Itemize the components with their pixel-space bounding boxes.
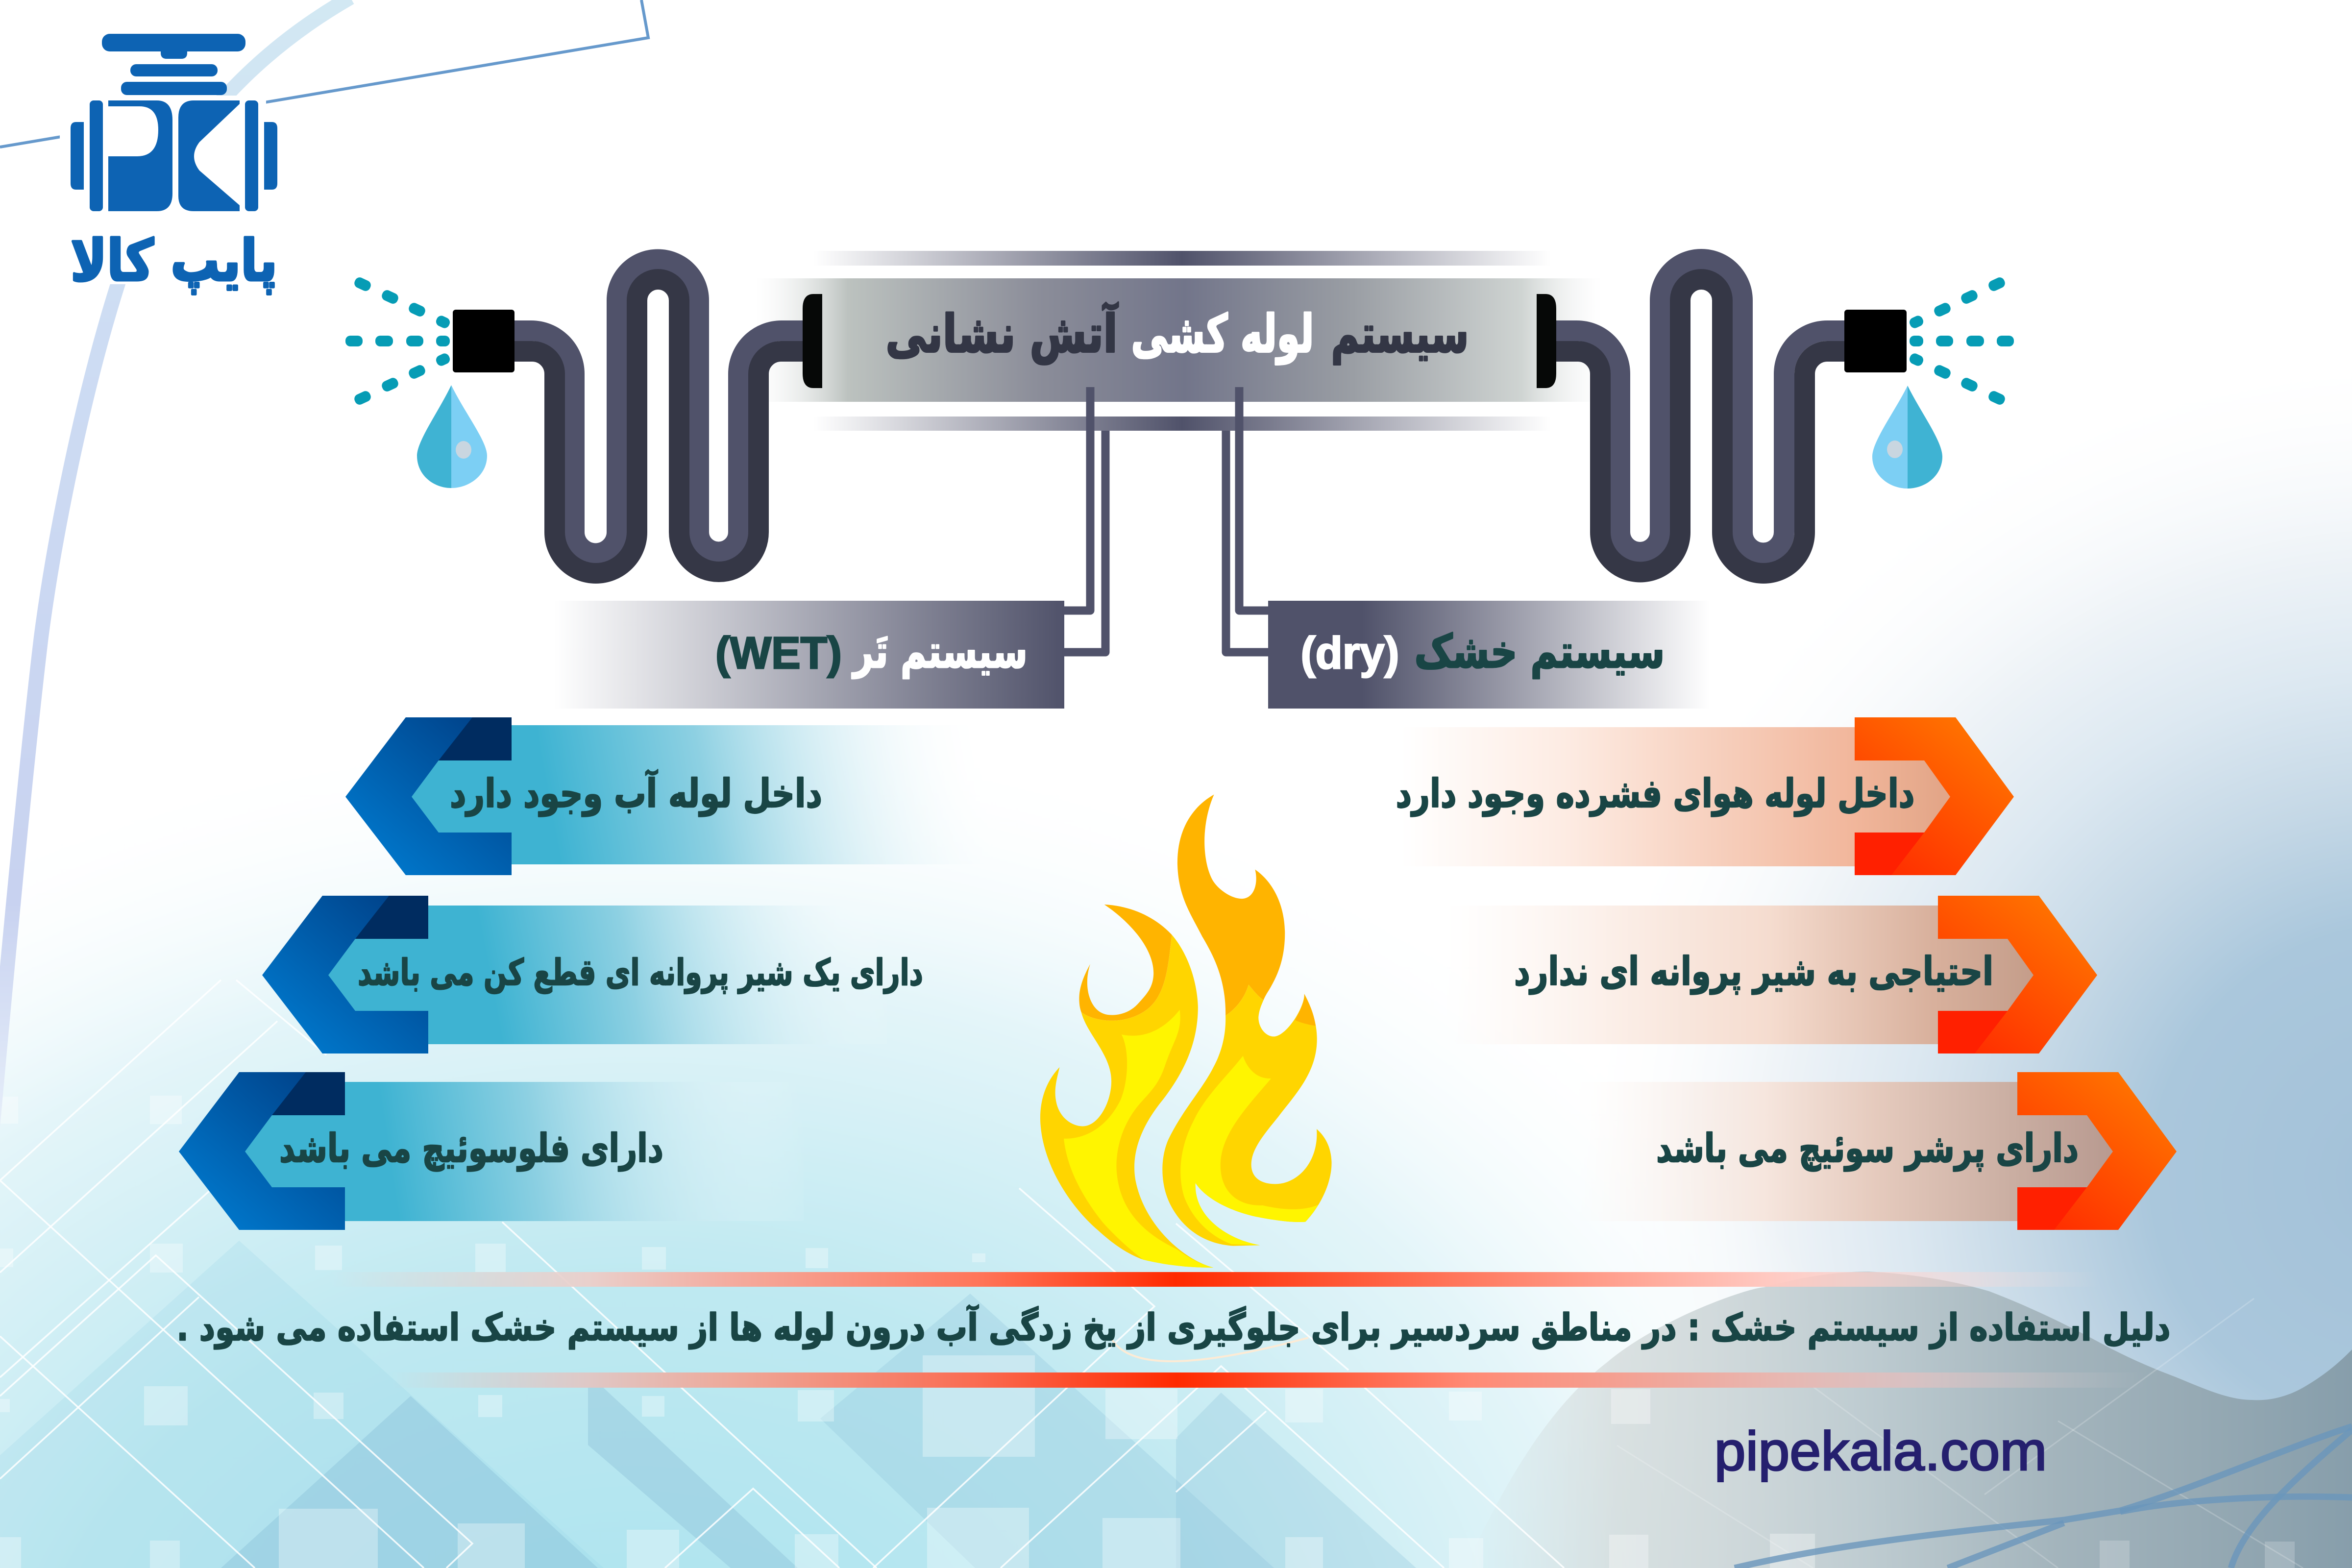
wet row 3: دارای فلوسوئیچ می باشد [279,1126,663,1172]
title top thin bar [813,251,1551,266]
right spray [1908,276,2014,406]
website url: pipekala.com [1714,1421,2047,1482]
right nozzle [1844,310,1907,372]
wet system box [554,601,1064,709]
right pipe flange [1537,294,1556,388]
decorative arc [0,0,350,1127]
right pipe [1553,259,1847,573]
wet system box: سیستم تَر [852,625,1028,679]
wet row 1 [345,717,1000,875]
dry row 1 [1396,717,2014,875]
dry row 3 [1578,1072,2177,1230]
wet row 1: داخل لوله آب وجود دارد [450,769,822,817]
right water drop [1872,386,1942,489]
left water drop [417,385,487,488]
connectors to wet and dry boxes [1064,387,1268,652]
dry row 2: احتیاجی به شیر پروانه ای ندارد [1514,949,1993,995]
left nozzle [453,310,514,372]
decorative blue frame line [0,0,648,147]
title text: سیستم [1331,304,1469,365]
dry system box [1268,601,1710,709]
wet row 2: دارای یک شیر پروانه ای قطع کن می باشد [358,952,923,994]
dry row 2 [1446,896,2097,1054]
wet system box: (WET) [715,628,842,678]
wet row 2 [262,896,923,1054]
logo: pipekala valve [71,34,277,211]
wet row 3 [179,1072,804,1230]
dry system box: (dry) [1300,628,1399,678]
title band [755,278,1602,402]
dry system box: سیستم خشک [1414,625,1665,679]
dry row 3: دارای پرشر سوئیچ می باشد [1656,1126,2079,1172]
left spray [345,276,451,406]
dry row 1: داخل لوله هوای فشرده وجود دارد [1396,771,1915,817]
title text [886,302,1469,365]
fire icon [1040,795,1332,1268]
footer bottom red bar [210,1372,2145,1388]
title text: آتش نشانی [886,302,1119,365]
left pipe [514,260,804,573]
footer top red bar [330,1272,2100,1287]
title lower thin bar [813,416,1551,431]
title text: لوله کشی [1131,304,1314,365]
left pipe flange [803,294,822,388]
logo wordmark: پایپ کالا [71,228,277,294]
